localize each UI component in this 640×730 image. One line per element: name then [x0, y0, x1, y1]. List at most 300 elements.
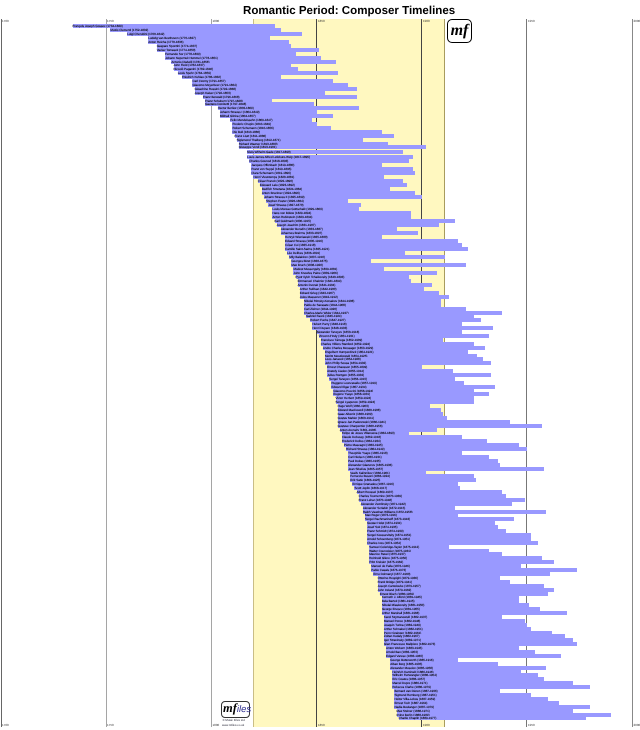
bar: Rubinstein [272, 215, 411, 219]
bar: Bloch: Ernest Bloch (1880-1959) [380, 592, 414, 596]
bar: Respighi [378, 576, 500, 580]
bar: Clara Schumann: Clara Schumann (1819-1896) [251, 171, 291, 175]
bar: Cui: César Cui (1835-1918) [285, 243, 316, 247]
bar: Spohr: Louis Spohr (1784-1859) [178, 71, 211, 75]
bar: Sousa: John Philip Sousa (1854-1932) [325, 361, 366, 365]
bar: Kalinnikov: Vasily Kalinnikov (1866-1901) [350, 470, 390, 474]
bar: Liadov: Anatoly Liadov (1855-1914) [327, 369, 364, 373]
bar: Tomasek: Vaclav Tomasek (1774-1850) [157, 48, 195, 52]
bar: Varese [386, 654, 561, 658]
bar: Chaplin: Charlie Chaplin (1889-1977) [399, 716, 436, 720]
bar: Dupre: Marcel Dupre (1886-1971) [392, 681, 428, 685]
bar: Berlioz: Hector Berlioz (1803-1869) [218, 106, 254, 110]
bar: Debussy: Claude Debussy (1862-1918) [342, 435, 381, 439]
bar: Fuchs [310, 318, 481, 322]
bar: Falla [371, 564, 521, 568]
bar: Vaughan Williams: Ralph Vaughan Williams (1872-1958) [363, 510, 413, 514]
bar: Wieniawski [285, 235, 382, 239]
bar: Coates [392, 677, 544, 681]
bar: Dukas [348, 459, 498, 463]
bar: Marshall: Arthur Marshall (1881-1968) [382, 611, 419, 615]
bar: Verdi: Giuseppe Verdi (1813-1901) [239, 145, 276, 149]
bar: Zemlinsky [361, 502, 512, 506]
bar: Scriabin: Alexander Scriabin (1872-1915) [363, 506, 405, 510]
bar: Dukas: Paul Dukas (1865-1935) [348, 459, 381, 463]
bar: Widor [304, 310, 502, 315]
bar: Kalinnikov [350, 470, 426, 475]
bar: Diabelli [171, 60, 336, 64]
bar: Lalo: Edouard Lalo (1823-1892) [260, 183, 295, 187]
bar: Liadov [327, 369, 453, 373]
bar: Lefebure-Wely [247, 154, 413, 159]
bar: Steiner [397, 709, 573, 713]
bar: Arensky: Anton Arensky (1861-1906) [340, 428, 376, 432]
bar: Clementi [110, 28, 281, 32]
bar: Dvorak: Antonin Dvorak (1841-1904) [298, 283, 335, 287]
bar: Stanford [321, 342, 474, 346]
bottom year 1750: 1750 [107, 722, 114, 726]
bar: Lalo [260, 183, 407, 187]
bar: Mendelssohn: Felix Mendelssohn (1809-1847) [230, 118, 273, 122]
bar: Dohnanyi: Erno Dohnanyi (1877-1960) [373, 572, 410, 576]
bar: van Dieren [394, 689, 500, 693]
bar: Ravel [369, 552, 502, 556]
bar: Faure: Gabriel Fauré (1845-1924) [306, 314, 342, 318]
bar: Sor: Fernando Sor (1778-1839) [165, 52, 201, 56]
bar: Miaskovsky [382, 603, 529, 607]
bar: Charpentier: Gustave Charpentier (1860-1956) [338, 424, 382, 428]
bar: Franck: César Franck (1822-1890) [258, 179, 293, 183]
title: Romantic Period: Composer Timelines [243, 5, 455, 17]
bar: Nielsen [348, 455, 489, 459]
bar: Sibelius: Jean Sibelius (1865-1957) [348, 467, 383, 471]
bar: Wagner [239, 142, 388, 146]
bar: Chopin: Frederic Chopin (1810-1849) [232, 122, 271, 126]
bar: Chausson: Ernest Chausson (1855-1899) [327, 365, 367, 369]
bar: Gottschalk: Louis Moreau Gottschalk (1829-1869) [272, 207, 323, 211]
bar: Bartok [382, 599, 519, 603]
bar: Lefebure-Wely: Louis James Alfred Lefebure-Wely (1817-1895) [247, 154, 310, 158]
bar: Nielsen: Carl Nielsen (1865-1931) [348, 455, 382, 459]
bar: Gliere [369, 556, 542, 560]
bar: Bax [386, 650, 535, 654]
top year 1800: 1800 [212, 19, 219, 23]
bar: Meyerbeer [192, 83, 348, 87]
bar: Diabelli: Antonio Diabelli (1781-1858) [171, 60, 209, 64]
bar: Lyapunov: Sergei Lyapunov (1859-1924) [336, 400, 375, 404]
bar: Schnabel [384, 627, 531, 631]
bar: Ponce [384, 619, 525, 623]
bar: Rontgen: Julius Rontgen (1855-1932) [327, 373, 364, 377]
bar: Strauss II [264, 195, 422, 199]
bar: Smetana [262, 187, 390, 191]
bar: Rossini: Gioachino Rossini (1792-1868) [195, 87, 236, 91]
bar: Carl Ziehrer [304, 307, 466, 311]
bar: Kreisler: Fritz Kreisler (1875-1962) [369, 560, 403, 564]
bar: Brahms: Johannes Brahms (1833-1897) [281, 231, 322, 235]
bar: S Taneyev [329, 377, 455, 381]
bar: Strauss I [220, 110, 317, 114]
bar: Rossini [195, 87, 357, 91]
bar: Thalberg: Sigismond Thalberg (1812-1871) [237, 138, 280, 142]
bar: Franck [258, 179, 403, 183]
bar: Romberg: Sigmund Romberg (1887-1951) [394, 693, 437, 697]
bar: Koussevitsky: Sergei Koussevitsky (1874-1951) [367, 533, 411, 537]
bar: Schmidt [367, 529, 506, 533]
bar: Eugene Ysaye [333, 392, 489, 396]
bar: Gossec [73, 24, 274, 28]
bar: Donizetti: Gaetano Donizetti (1797-1848) [205, 102, 246, 106]
bottom year 1850: 1850 [318, 722, 325, 726]
bar: Verdi [239, 145, 426, 149]
bar: Paine: John Knowles Paine (1839-1906) [293, 271, 338, 275]
bar: Richard Strauss [346, 447, 527, 451]
website line: www.mfiles.co.uk [222, 723, 244, 727]
logo: mfiles bottom [221, 701, 251, 727]
bar: MacDowell: Edward MacDowell (1860-1908) [338, 408, 380, 412]
bar: Spontini [157, 44, 291, 48]
bar: Hummel [165, 56, 321, 60]
bar: Marshall [382, 611, 567, 615]
bar: Steiner: Max Steiner (1888-1971) [397, 709, 430, 713]
bar: Sibelius [348, 467, 544, 471]
bar: Kodaly [384, 634, 565, 638]
bar: Roussel [357, 490, 502, 494]
bar: Berg: Alban Berg (1885-1935) [390, 662, 422, 666]
bar: Bloch [380, 592, 548, 596]
bar: Debussy [342, 435, 462, 439]
bar: Spohr [178, 71, 338, 75]
bar: Busoni [350, 474, 474, 478]
bar: Alford: Kenneth J. Alford (1881-1945) [382, 595, 422, 599]
bar: Elgar [331, 385, 495, 389]
bar: Tournemire [359, 494, 506, 498]
bar: Ravel: Maurice Ravel (1875-1937) [369, 552, 406, 556]
bar: Faure [306, 314, 474, 318]
bar: Charpentier [338, 424, 542, 428]
bar: Gade [247, 150, 403, 154]
bar: Mahler [338, 416, 447, 420]
bar: Gade: Niels Wilhelm Gade (1817-1890) [247, 150, 291, 154]
bar: Bull [232, 130, 382, 134]
bar: Kreisler [369, 560, 554, 564]
bar: Gounod: Charles Gounod (1818-1893) [249, 159, 288, 163]
bar: Granados: Enrique Granados (1867-1916) [352, 482, 394, 486]
bar: Bartok: Bela Bartok (1881-1945) [382, 599, 414, 603]
bar: Scriabin [363, 506, 455, 510]
bar: Dvorak [298, 283, 432, 287]
bar: Paine [293, 271, 437, 275]
bar: Courvoisier: Walter Courvoisier (1875-1931) [369, 548, 411, 552]
bar: Rubinstein: Anton Rubinstein (1829-1894) [272, 215, 312, 219]
bar: Casals [371, 568, 577, 572]
top year 2000: 2000 [634, 19, 640, 23]
bar: Schoenberg [367, 537, 531, 541]
bar: Ives: Charles Ives (1874-1954) [367, 541, 401, 545]
bar: Toch [394, 701, 559, 705]
bar: Sor [165, 52, 296, 56]
bar: Stravinsky [384, 638, 573, 642]
bar: Borodin: Alexander Borodin (1833-1887) [281, 227, 323, 231]
bar: Szymanowski: Karol Szymanowski (1882-1937) [384, 615, 427, 619]
bar: Ives [367, 541, 538, 545]
bar: Grieg: Edvard Grieg (1843-1907) [300, 291, 335, 295]
bar: Mussorgsky: Modest Mussorgsky (1839-1881) [293, 267, 337, 271]
bar: Satie: Erik Satie (1866-1925) [350, 478, 380, 482]
top year 1950: 1950 [528, 19, 535, 23]
bar: Mascagni: Pietro Mascagni (1863-1945) [344, 443, 383, 447]
bar: Cherubini [127, 32, 302, 36]
bar: Suk [367, 525, 498, 529]
bar: Bulow [272, 211, 411, 215]
bar: d'Indy [319, 334, 489, 338]
bar: Schoenberg: Arnold Schoenberg (1874-1951) [367, 537, 410, 541]
bar: Joachim [277, 223, 439, 227]
bar: Glazunov: Alexander Glazunov (1865-1936) [348, 463, 392, 467]
bar: Paganini: Niccolò Paganini (1782-1840) [174, 67, 213, 71]
bar: Lehar: Franz Lehar (1870-1948) [359, 498, 392, 502]
bar: Reger [365, 513, 458, 517]
logo box [221, 701, 250, 718]
bar: Czerny: Carl Czerny (1791-1857) [192, 79, 225, 83]
bar: Elgar: Edward Elgar (1857-1934) [331, 385, 366, 389]
bar: Webern: Anton Webern (1883-1945) [386, 646, 422, 650]
bar: Massenet [300, 295, 449, 299]
bar: Mascagni [344, 443, 519, 447]
bar: MacDowell [338, 408, 441, 412]
bar: A Taneyev [317, 330, 462, 334]
bar: Butterworth [390, 658, 458, 662]
bar: Gliere: Reinhold Gliere (1875-1956) [369, 556, 407, 560]
bar: Grainger: Percy Grainger (1882-1961) [384, 630, 421, 634]
bar: Chabrier [298, 279, 411, 283]
bar: Coates: Eric Coates (1886-1957) [392, 677, 425, 681]
bar: Kuhlau: Friedrich Kuhlau (1786-1832) [182, 75, 221, 79]
bar: Dupre [392, 681, 573, 685]
bar: Glinka [220, 114, 333, 118]
bar: Reicha: Anton Reicha (1770-1836) [148, 40, 183, 44]
bar: Villa-Lobos: Heitor Villa-Lobos (1887-1959) [394, 697, 435, 701]
bar: Vieuxtemps [253, 175, 384, 179]
bar: Richard Strauss: Richard Strauss (1864-1949) [346, 447, 385, 451]
bar: Casals: Pablo Casals (1876-1973) [371, 568, 406, 572]
bar: Malipiero [384, 642, 577, 646]
bar: A Taneyev: Alexander Taneyev (1850-1918) [317, 330, 359, 334]
bar: Offenbach: Jacques Offenbach (1819-1880) [251, 163, 294, 167]
bar: Reger: Max Reger (1873-1916) [365, 513, 397, 517]
bar: Miaskovsky: Nikolai Miaskovsky (1881-1950) [382, 603, 424, 607]
bar: Tchaikovsky: Pyotr Ilyich Tchaikovsky (1840-1893) [296, 275, 344, 279]
bar: Canteloube [378, 584, 544, 588]
bar: Clementi: Muzio Clementi (1752-1832) [110, 28, 148, 32]
bottom year 1700: 1700 [2, 722, 9, 726]
bar: Rimsky-Korsakov: Nikolai Rimsky-Korsakov (1844-1908) [304, 299, 354, 303]
bar: Saint-Saens: Camille Saint-Saëns (1835-1921) [285, 247, 329, 251]
bar: Szymanowski [384, 615, 502, 619]
bar: Holst [367, 521, 495, 525]
bar: Puccini [333, 388, 474, 393]
bar: Borodin [281, 227, 397, 231]
copyright line: © Music Files Ltd [222, 718, 245, 722]
bar: Satie [350, 478, 476, 482]
bar: Josef Strauss: Josef Strauss (1827-1870) [268, 203, 304, 207]
bar: Bull: Ole Bull (1810-1880) [232, 130, 260, 134]
bar: Herbert [336, 396, 474, 400]
bar: Suk: Josef Suk (1874-1935) [367, 525, 397, 529]
logo: mf top [447, 19, 472, 42]
bar: Massenet: Jules Massenet (1842-1912) [300, 295, 338, 299]
bar: Granados [352, 482, 458, 486]
bar: Sarasate [304, 303, 441, 307]
bar: Mahler: Gustav Mahler (1860-1911) [338, 416, 374, 420]
bar: Paganini [174, 67, 298, 71]
bar: Bruch: Max Bruch (1838-1920) [291, 263, 323, 267]
bar: Tarrega: Francisco Tárrega (1852-1909) [321, 338, 362, 342]
bar: Saint-Saens [285, 247, 468, 251]
bar: Chabrier: Emmanuel Chabrier (1841-1894) [298, 279, 342, 283]
bar: Rachmaninoff: Sergei Rachmaninoff (1873-1943) [365, 517, 410, 521]
bar: Dohnanyi [373, 572, 550, 576]
bar: Foster [266, 199, 348, 203]
bar: Bizet [291, 259, 371, 263]
bar: Varese: Edgard Varese (1883-1965) [386, 654, 423, 658]
bar: Josef Strauss [268, 203, 361, 207]
bar: Canteloube: Joseph Canteloube (1879-1957) [378, 584, 421, 588]
bar: Glinka: Mikhail Glinka (1804-1857) [220, 114, 256, 118]
bar: Bridge [378, 580, 510, 584]
bar: Bax: Arnold Bax (1883-1953) [386, 650, 418, 654]
bar: Gounod [249, 159, 409, 163]
bar: Enescu [382, 607, 540, 611]
bar: Donizetti [205, 102, 314, 106]
bar: Boulanger: Nadia Boulanger (1887-1979) [394, 705, 434, 709]
logo: mf top: mf [451, 22, 468, 39]
bar: Kaminski: Heinrich Kaminski (1886-1946) [392, 670, 434, 674]
top year 1850: 1850 [318, 19, 325, 23]
bar: Delibes [287, 251, 405, 255]
bar: Chaplin [399, 716, 586, 720]
bar: Theophile Ysaye: Theophile Ysaye (1865-1918) [348, 451, 388, 455]
bar: Butterworth: George Butterworth (1885-1916) [390, 658, 434, 662]
bar: Messager [323, 346, 485, 350]
bar: Villanueva: Felipe de Jesus Villanueva (1862-1893) [342, 431, 395, 435]
bar: Coleridge-Taylor: Samuel Coleridge-Taylor (1875-1912) [369, 545, 419, 549]
bar: Delius [342, 439, 487, 443]
bar: Balakirev [289, 255, 445, 259]
bar: Berlin [397, 712, 611, 717]
bar: van Dieren: Bernard van Dieren (1887-1936) [394, 689, 438, 693]
bar: Kuhlau [182, 75, 281, 79]
bar: Vieuxtemps: Henri Vieuxtemps (1820-1881) [253, 175, 294, 179]
bar: Gottschalk [272, 207, 359, 211]
bar: Czerny [192, 79, 333, 83]
bar: Tarrega [321, 338, 443, 342]
bar: Sullivan: Arthur Sullivan (1842-1900) [300, 287, 336, 291]
bar: Leoncavallo [331, 381, 464, 385]
bar: Hummel: Johann Nepomuk Hummel (1778-1851) [165, 56, 218, 60]
bar: Berlioz [218, 106, 359, 110]
bar: Coleridge-Taylor [369, 545, 449, 549]
bar: Messager: Andre Charles Messager (1853-1929) [323, 346, 373, 350]
bar: Leoncavallo: Ruggero Leoncavallo (1857-1919) [331, 381, 377, 385]
bar: Roussel: Albert Roussel (1869-1937) [357, 490, 393, 494]
bar: Sarasate: Pablo de Sarasate (1844-1908) [304, 303, 346, 307]
bar: Suppe [251, 167, 413, 171]
bar: Lyapunov [336, 400, 474, 404]
bar: Holst: Gustav Holst (1874-1934) [367, 521, 401, 525]
bar: Eduard Strauss [285, 239, 458, 243]
bar: Reicha [148, 40, 289, 44]
bar: Villa-Lobos [394, 697, 548, 701]
bar: Berwald [203, 95, 357, 99]
bar: Carl Ziehrer: Carl Ziehrer (1844-1920) [304, 307, 337, 311]
bar: Duparc [312, 326, 493, 330]
bar: Goldmark: Karl Goldmark (1830-1915) [275, 219, 311, 223]
bar: Mendelssohn [230, 118, 312, 122]
bar: Berlin: Irving Berlin (1888-1989) [397, 712, 430, 716]
bar: Ponce: Manuel Ponce (1882-1948) [384, 619, 420, 623]
bar: Bruckner: Anton Bruckner (1824-1896) [262, 191, 300, 195]
bar: Bulow: Hans von Bülow (1829-1894) [272, 211, 311, 215]
bar: Wolf: Hugo Wolf (1860-1903) [338, 404, 369, 408]
bar: Grieg [300, 291, 439, 295]
bar: Albeniz [338, 412, 443, 416]
bar: Gossec: François Joseph Gossec (1734-1829) [73, 24, 123, 28]
bar: Kaiser: Joseph Kaiser (1792-1853) [195, 91, 231, 95]
bar: Courvoisier [369, 548, 489, 553]
bar: Paderewski [338, 420, 510, 424]
bar: Bruch [291, 263, 466, 267]
bar: Koussevitsky [367, 533, 531, 537]
bar: S Taneyev: Sergei Taneyev (1856-1915) [329, 377, 367, 381]
bar: Spontini: Gaspare Spontini (1774-1837) [157, 44, 197, 48]
bar: Moszkowski [325, 354, 476, 358]
bar: Meyerbeer: Giacomo Meyerbeer (1791-1864) [192, 83, 237, 87]
bar: Chausson [327, 365, 422, 369]
bar: Malipiero: Gian Francesco Malipiero (1882-1973) [384, 642, 435, 646]
bar: Strauss II: Johann Strauss II (1825-1899) [264, 195, 305, 199]
bar: Respighi: Ottorino Respighi (1879-1936) [378, 576, 418, 580]
bar: Glazunov [348, 463, 500, 467]
bar: Fuchs: Robert Fuchs (1847-1927) [310, 318, 345, 322]
bar: Janacek: Leos Janacek (1854-1928) [325, 357, 361, 361]
top year 1900: 1900 [423, 19, 430, 23]
bar: Rimsky-Korsakov [304, 299, 441, 303]
bar: Thalberg [237, 138, 363, 142]
bar: Sousa [325, 361, 491, 365]
bar: Furtwangler [392, 673, 538, 677]
bar: Falla: Manuel de Falla (1876-1946) [371, 564, 410, 568]
logo wordmark: mfiles [223, 701, 251, 715]
bar: Tournemire: Charles Tournemire (1870-1939) [359, 494, 402, 498]
bar: Schumann [232, 126, 331, 130]
bar: Foster: Stephen Foster (1826-1864) [266, 199, 304, 203]
bar: Humperdinck: Engelbert Humperdinck (1854-1921) [325, 350, 374, 354]
bar: Parry: Hubert Parry (1848-1918) [312, 322, 347, 326]
bar: Suppe: Franz von Suppé (1819-1895) [251, 167, 291, 171]
bar: Clarke [392, 685, 590, 689]
bar: Bruckner [262, 191, 415, 195]
bar: Furtwangler: Wilhelm Furtwangler (1886-1954) [392, 673, 437, 677]
bar: Chopin [232, 122, 317, 126]
bar: Arensky [340, 428, 437, 432]
bar: Liszt [235, 134, 394, 138]
bottom year 1950: 1950 [528, 722, 535, 726]
bar: d'Indy: Vincent d'Indy (1851-1931) [319, 334, 355, 338]
bar: Tchaikovsky [296, 275, 409, 279]
bar: Puccini: Giacomo Puccini (1858-1924) [333, 388, 373, 392]
bar: Toch: Ernest Toch (1887-1964) [394, 701, 427, 705]
